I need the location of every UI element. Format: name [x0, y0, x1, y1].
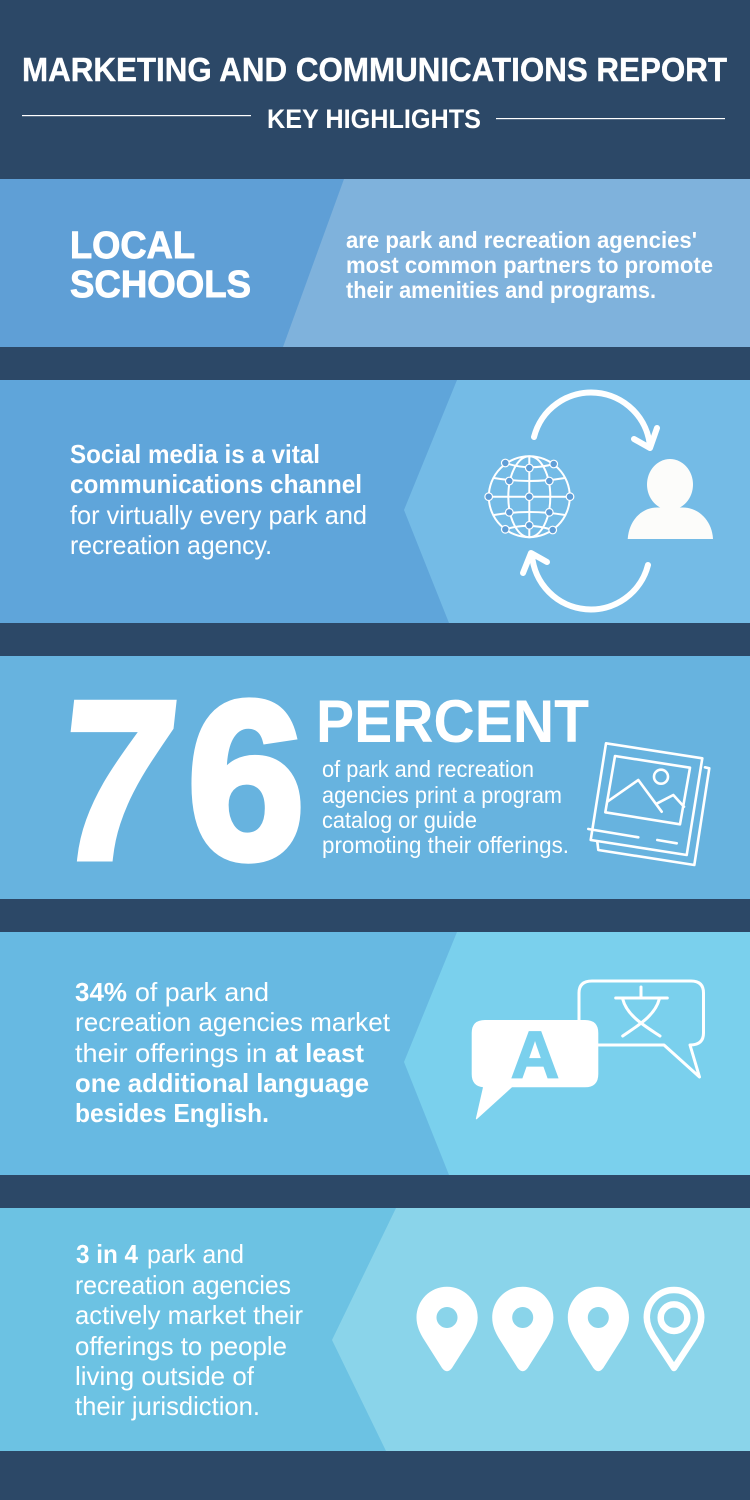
text block: jurisdiction: park and — [147, 1239, 244, 1269]
panel: outside jurisdiction — [0, 1208, 750, 1451]
icon: location pins — [416, 1287, 701, 1371]
icon: globe — [485, 456, 574, 537]
icon: photo catalog — [588, 743, 709, 865]
icon: filled speech bubble — [472, 1018, 598, 1119]
text block: social media: recreation agency. — [70, 530, 272, 560]
text block: jurisdiction: their jurisdiction. — [75, 1391, 260, 1421]
panel: local schools — [0, 179, 750, 347]
big number 76: 6 — [187, 654, 305, 906]
heading: local schools — [70, 225, 251, 306]
icon: filled speech bubble: A — [510, 1018, 560, 1093]
text block: program catalog: of park and recreation — [322, 756, 534, 782]
big number 76 — [46, 654, 305, 906]
text block: schools description: most common partners to promote — [346, 252, 713, 278]
icon: outlined speech bubble — [579, 981, 704, 1077]
text block: schools description: are park and recreation agencies' — [346, 227, 697, 253]
text block: language: their offerings in — [75, 1038, 267, 1068]
text block: program catalog: catalog or guide — [322, 807, 477, 833]
text block: language: 34% — [75, 977, 127, 1007]
text block: social media: communications channel — [70, 469, 362, 499]
panel: social media — [0, 380, 750, 623]
big number 76: 7 — [46, 655, 187, 906]
icon: arrow bottom — [523, 553, 648, 609]
heading: local schools: LOCAL — [70, 225, 195, 267]
panel: additional language — [0, 932, 750, 1175]
text block: language: besides English. — [75, 1098, 269, 1128]
text block: language: recreation agencies market — [75, 1007, 391, 1037]
text block: schools description: their amenities and programs. — [346, 277, 656, 303]
header: title and subtitle — [22, 51, 727, 134]
text block: jurisdiction: actively market their — [75, 1300, 303, 1330]
text block: social media: for virtually every park and — [70, 500, 367, 530]
text block: jurisdiction: offerings to people — [75, 1331, 287, 1361]
icon: arrow top — [534, 393, 657, 448]
text block: jurisdiction — [75, 1239, 303, 1421]
subtitle with rules: KEY HIGHLIGHTS — [267, 104, 481, 134]
heading: percent: PERCENT — [316, 688, 589, 755]
icon: person — [628, 459, 713, 539]
text block: language: of park and — [135, 977, 269, 1007]
text block: language: at least — [275, 1038, 364, 1068]
text block: jurisdiction: 3 in 4 — [76, 1239, 138, 1269]
text block: jurisdiction: living outside of — [75, 1361, 255, 1391]
panel: 76 percent — [0, 654, 750, 906]
text block: social media — [70, 439, 367, 560]
text block: program catalog: promoting their offerings. — [322, 832, 569, 858]
heading: local schools: SCHOOLS — [70, 264, 251, 306]
text block: schools description — [346, 227, 713, 303]
text block: program catalog — [322, 756, 569, 858]
text block: program catalog: agencies print a program — [322, 782, 562, 808]
text block: social media: Social media is a vital — [70, 439, 320, 469]
text block: language: one additional language — [75, 1068, 369, 1098]
text block: language — [75, 977, 391, 1128]
title: MARKETING AND COMMUNICATIONS REPORT — [22, 51, 727, 88]
text block: jurisdiction: recreation agencies — [75, 1270, 291, 1300]
